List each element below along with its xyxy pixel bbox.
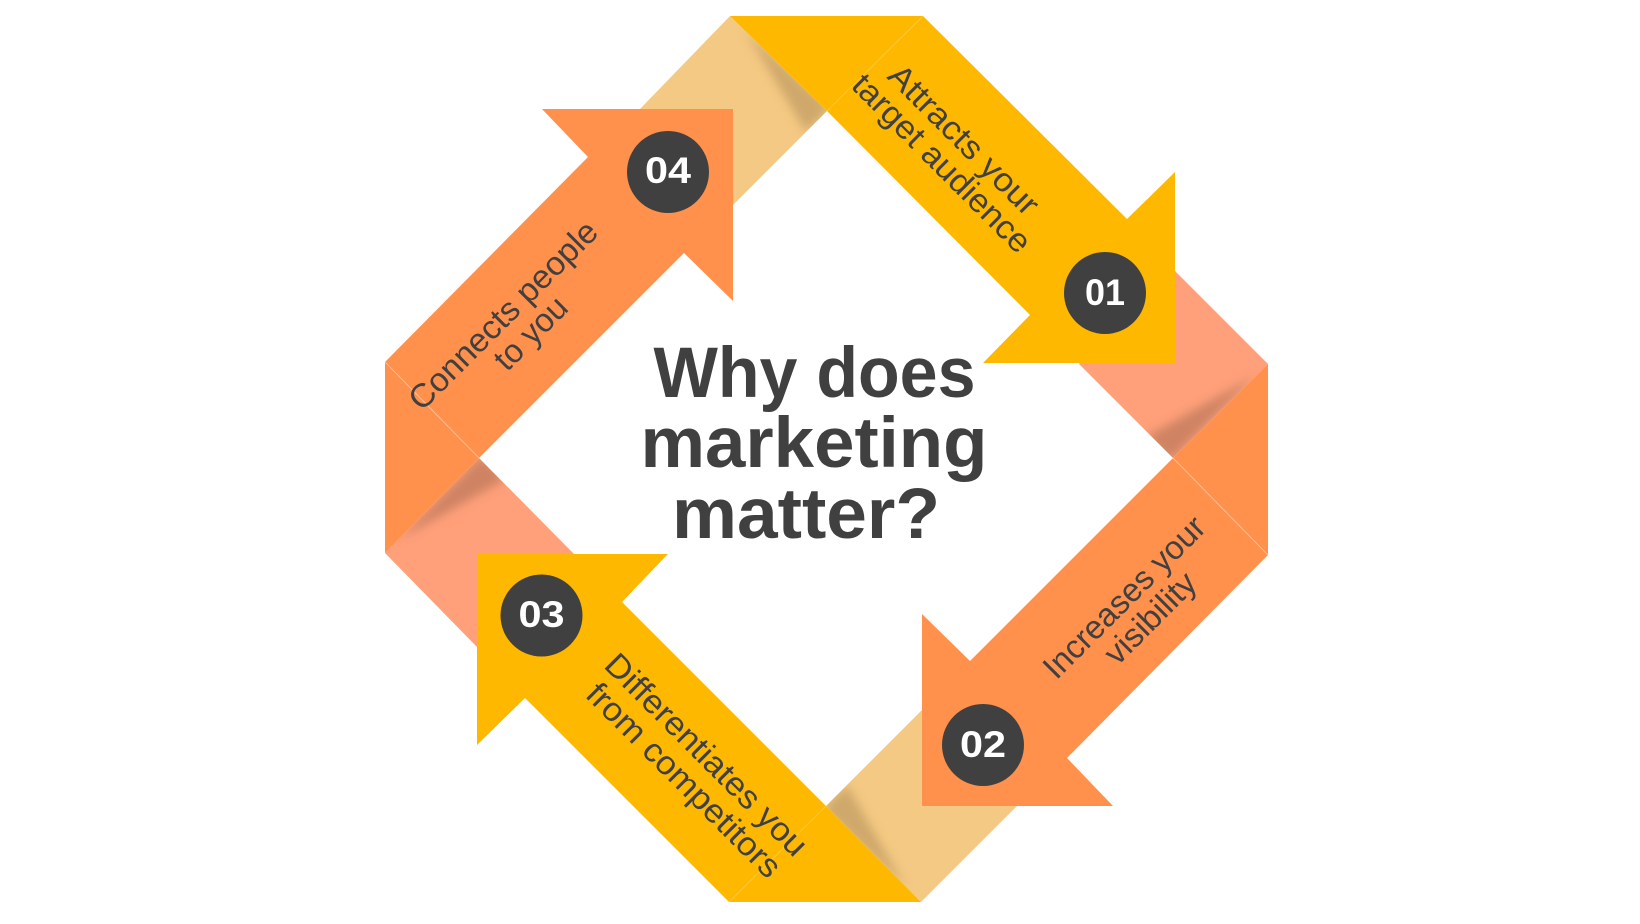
title: Why does: [654, 334, 976, 413]
fold band: bottom tan: [823, 710, 1017, 902]
arrow 02: increases your visibility: [922, 364, 1268, 806]
arrow 01: attracts your target audience: [730, 16, 1175, 363]
label 02: Increases your: [1035, 508, 1213, 686]
title: [640, 334, 988, 554]
fold band: left salmon: [385, 455, 574, 647]
badge 02: 02: [960, 724, 1006, 765]
fold band: top tan: [640, 16, 830, 205]
arrow 04: connects people to you: [385, 109, 733, 553]
label 03: Differentiates you: [598, 645, 816, 863]
label 01: target audience: [845, 66, 1039, 260]
fold band: right salmon: [1079, 268, 1268, 461]
badge 04: 04: [645, 150, 691, 191]
badge 01: [1064, 252, 1146, 334]
badge 03: [500, 574, 582, 656]
label 04: to you: [486, 288, 575, 377]
badge 01: 01: [1085, 272, 1125, 313]
infographic: marketing cycle: [385, 16, 1268, 902]
label 01: Attracts your: [881, 56, 1047, 222]
label 04: Connects people: [401, 213, 605, 417]
title: marketing: [640, 404, 988, 483]
badge 03: 03: [518, 594, 564, 635]
title: matter?: [672, 475, 940, 554]
arrow 03: differentiates you from competitors: [477, 554, 921, 902]
badge 02: [942, 704, 1024, 786]
label 02: visibility: [1096, 564, 1204, 672]
label 03: from competitors: [579, 675, 789, 885]
badge 04: [627, 131, 709, 213]
